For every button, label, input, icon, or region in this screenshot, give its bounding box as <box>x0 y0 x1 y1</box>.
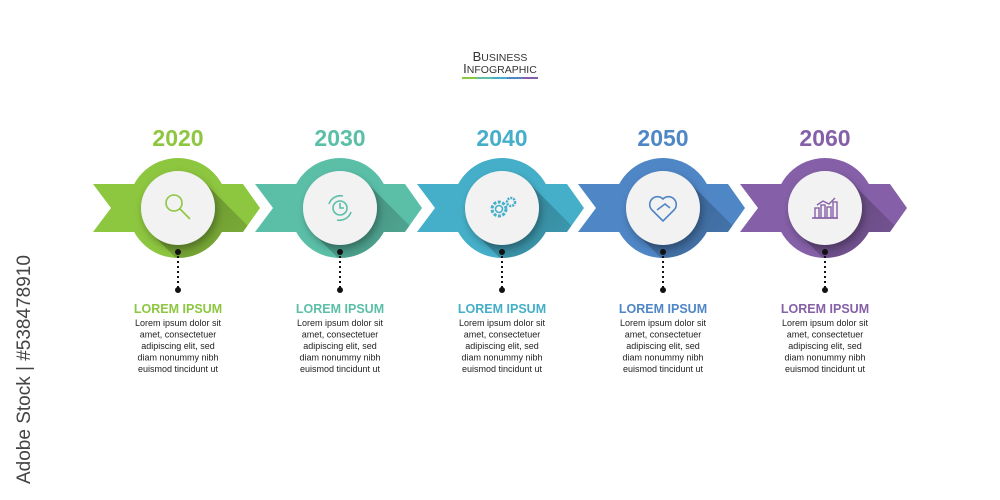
step 3: 2040: euismod tincidunt ut <box>462 364 543 374</box>
watermark: vertical: Adobe Stock | #538478910 <box>14 255 35 484</box>
step 3: 2040 <box>417 130 584 372</box>
title: BUSINESS <box>473 49 527 64</box>
title <box>462 49 538 79</box>
step 4: 2050: euismod tincidunt ut <box>623 364 704 374</box>
step 2: 2030: adipiscing elit, sed <box>303 341 377 351</box>
step 2: 2030: amet, consectetuer <box>302 330 378 340</box>
step 3: 2040: amet, consectetuer <box>464 330 540 340</box>
step 4: 2050: adipiscing elit, sed <box>626 341 700 351</box>
step 2: 2030: Lorem ipsum dolor sit <box>297 318 384 328</box>
step 2: 2030: euismod tincidunt ut <box>300 364 381 374</box>
step 1: 2020: diam nonummy nibh <box>137 352 219 362</box>
step 2: 2030: LOREM IPSUM <box>296 302 384 316</box>
step 1: 2020: adipiscing elit, sed <box>141 341 215 351</box>
icon: gears <box>492 198 515 216</box>
step 4: 2050: amet, consectetuer <box>625 330 701 340</box>
step 5: 2060: adipiscing elit, sed <box>788 341 862 351</box>
step 4: 2050: Lorem ipsum dolor sit <box>620 318 707 328</box>
step 1: 2020 <box>93 130 260 372</box>
step 5: 2060: amet, consectetuer <box>787 330 863 340</box>
title: INFOGRAPHIC <box>463 61 537 76</box>
step 2: 2030: 2030 <box>314 125 366 151</box>
icon: magnifier <box>166 195 190 219</box>
step 5: 2060: euismod tincidunt ut <box>785 364 866 374</box>
step 5: 2060: diam nonummy nibh <box>784 352 866 362</box>
icon: bar chart <box>812 198 838 218</box>
step 5: 2060 <box>740 130 907 372</box>
step 3: 2040: LOREM IPSUM <box>458 302 546 316</box>
icon: handshake heart <box>650 197 676 221</box>
step 4: 2050: 2050 <box>637 125 689 151</box>
step 1: 2020: Lorem ipsum dolor sit <box>135 318 222 328</box>
step 1: 2020: 2020 <box>152 125 204 151</box>
step 1: 2020: amet, consectetuer <box>140 330 216 340</box>
step 5: 2060: LOREM IPSUM <box>781 302 869 316</box>
step 2: 2030 <box>255 130 422 372</box>
step 2: 2030: diam nonummy nibh <box>299 352 381 362</box>
step 1: 2020: euismod tincidunt ut <box>138 364 219 374</box>
step 3: 2040: diam nonummy nibh <box>461 352 543 362</box>
step 4: 2050: diam nonummy nibh <box>622 352 704 362</box>
step 1: 2020: LOREM IPSUM <box>134 302 222 316</box>
step 5: 2060: Lorem ipsum dolor sit <box>782 318 869 328</box>
step 4: 2050: LOREM IPSUM <box>619 302 707 316</box>
step 3: 2040: adipiscing elit, sed <box>465 341 539 351</box>
step 4: 2050 <box>578 130 745 372</box>
step 5: 2060: 2060 <box>799 125 851 151</box>
step 3: 2040: Lorem ipsum dolor sit <box>459 318 546 328</box>
step 3: 2040: 2040 <box>476 125 528 151</box>
icon: clock cycle <box>329 196 351 220</box>
